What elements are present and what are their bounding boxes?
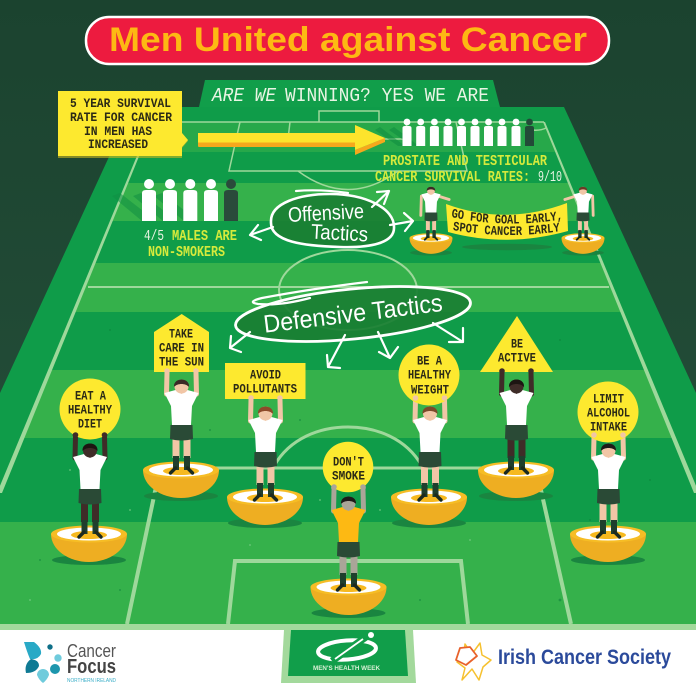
logo: men's health week goal [281,630,416,683]
footer white band [0,630,696,696]
heading tab: are we winning [199,80,500,107]
player: take care in the sun: TAKE [169,326,193,341]
icon row: 9 of 10 survival [375,119,534,146]
player: right banner holder [561,187,605,256]
callout: 5 year survival: RATE FOR CANCER [70,110,172,125]
player: don't smoke: DON'T [333,454,364,469]
player: be a healthy weight [391,344,467,528]
goal banner with two players [410,186,604,256]
goal banner with two players: SPOT CANCER EARLY [453,222,560,236]
logo: irish cancer society: Irish Cancer Society [498,646,671,669]
offensive tactics bubble [271,190,394,247]
callout: 5 year survival: 5 YEAR SURVIVAL [70,96,171,111]
offensive tactics bubble: Offensive [287,200,365,227]
logo: irish cancer society [456,643,671,680]
football pitch [0,107,696,630]
text: 4/5 males non-smokers [144,228,237,261]
heading tab: are we winning: ARE WE [211,85,277,107]
logo: men's health week goal: MEN'S HEALTH WEEK [313,665,380,672]
player: left banner holder [409,187,453,256]
player: eat a healthy diet: DIET [78,416,102,431]
logo: cancer focus [24,641,116,684]
arrow: increasing survival [198,125,385,155]
title banner [86,17,609,64]
player: eat a healthy diet [51,378,127,565]
defensive tactics bubble [233,278,473,350]
text: 4/5 males non-smokers: 4/5 [144,228,164,245]
icon row: 4 of 5 non-smokers [112,179,238,221]
player: be a healthy weight: BE A [417,353,442,368]
goal banner with two players: GO FOR GOAL EARLY, [452,209,560,224]
player: eat a healthy diet: EAT A [75,388,106,403]
player: don't smoke: SMOKE [332,468,365,483]
callout: 5 year survival [58,91,188,158]
arrows: defensive [230,323,463,368]
player: avoid pollutants: POLLUTANTS [233,381,297,396]
player: don't smoke [310,442,386,618]
player: be active: ACTIVE [498,350,536,365]
defensive tactics bubble: Defensive Tactics [262,289,444,339]
player: avoid pollutants [225,363,306,528]
player: limit alcohol intake: INTAKE [590,419,627,434]
callout: 5 year survival: INCREASED [88,137,148,152]
logo: cancer focus: Cancer [67,641,116,661]
player: avoid pollutants: AVOID [250,367,281,382]
text: 4/5 males non-smokers: NON-SMOKERS [148,244,225,261]
player: limit alcohol intake: LIMIT [593,391,624,406]
text: prostate and testicular survival: PROSTATE AND TESTICULAR [383,153,547,170]
heading tab: are we winning: WINNING? YES WE ARE [285,85,489,107]
player: limit alcohol intake: ALCOHOL [587,405,630,420]
text: 4/5 males non-smokers: MALES ARE [172,228,237,245]
title banner: Men United against Cancer [109,21,587,59]
text: prostate and testicular survival: CANCER SURVIVAL RATES: [375,169,530,186]
player: take care in the sun [143,314,219,501]
callout: 5 year survival: IN MEN HAS [84,124,152,139]
player: be active [478,316,554,501]
player: limit alcohol intake [570,382,646,565]
arrows: offensive [250,191,413,240]
player: eat a healthy diet: HEALTHY [68,402,112,417]
player: be a healthy weight: WEIGHT [411,382,449,397]
player: take care in the sun: THE SUN [159,354,204,369]
text: prostate and testicular survival: 9/10 [538,169,562,186]
offensive tactics bubble: Tactics [310,220,369,246]
logo: cancer focus: NORTHERN IRELAND [67,678,116,684]
text: prostate and testicular survival [375,153,562,186]
player: be active: BE [511,336,523,351]
logo: cancer focus: Focus [67,656,116,678]
player: be a healthy weight: HEALTHY [408,367,451,382]
player: take care in the sun: CARE IN [159,340,204,355]
